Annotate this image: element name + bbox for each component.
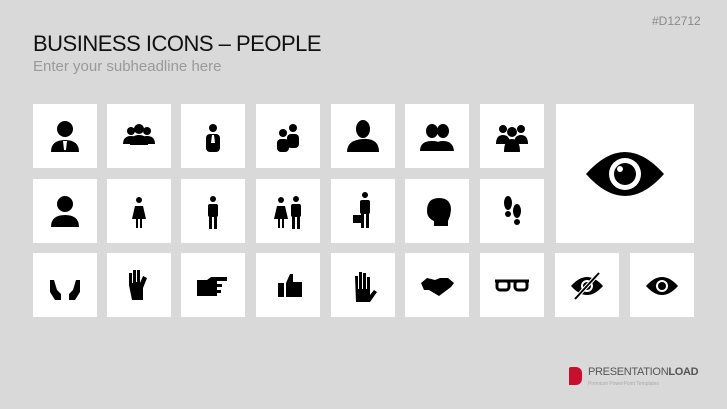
icon: handshake xyxy=(405,253,469,317)
icon: head profile xyxy=(405,179,469,243)
icon: thumbs up xyxy=(256,253,320,317)
icon: big eye xyxy=(556,104,694,243)
icon: eye xyxy=(630,253,694,317)
icon: pointing hand xyxy=(181,253,245,317)
icon: footprints xyxy=(480,179,544,243)
icon: person tie xyxy=(181,104,245,168)
logo: Premium PowerPoint Templates xyxy=(588,381,659,387)
logo text: PRESENTATIONLOAD xyxy=(588,366,698,378)
icon: eye crossed xyxy=(555,253,619,317)
icon: ok hand xyxy=(107,253,171,317)
icon: couple xyxy=(256,179,320,243)
icon: two silhouettes xyxy=(405,104,469,168)
icon: man xyxy=(181,179,245,243)
logo mark xyxy=(569,367,582,385)
icon: two persons xyxy=(256,104,320,168)
icon: woman xyxy=(107,179,171,243)
subheadline: Enter your subheadline here xyxy=(33,58,221,75)
logo xyxy=(569,366,698,387)
icon: team xyxy=(480,104,544,168)
code label: #D12712 xyxy=(652,14,701,28)
title: BUSINESS ICONS – PEOPLE xyxy=(33,31,321,56)
icon: silhouette xyxy=(331,104,395,168)
icon: man head xyxy=(33,179,97,243)
icon: group xyxy=(107,104,171,168)
icon: open hands xyxy=(33,253,97,317)
icon: glasses xyxy=(480,253,544,317)
icon: businessman with case xyxy=(331,179,395,243)
icon: raised hand xyxy=(331,253,395,317)
icon: businessman xyxy=(33,104,97,168)
